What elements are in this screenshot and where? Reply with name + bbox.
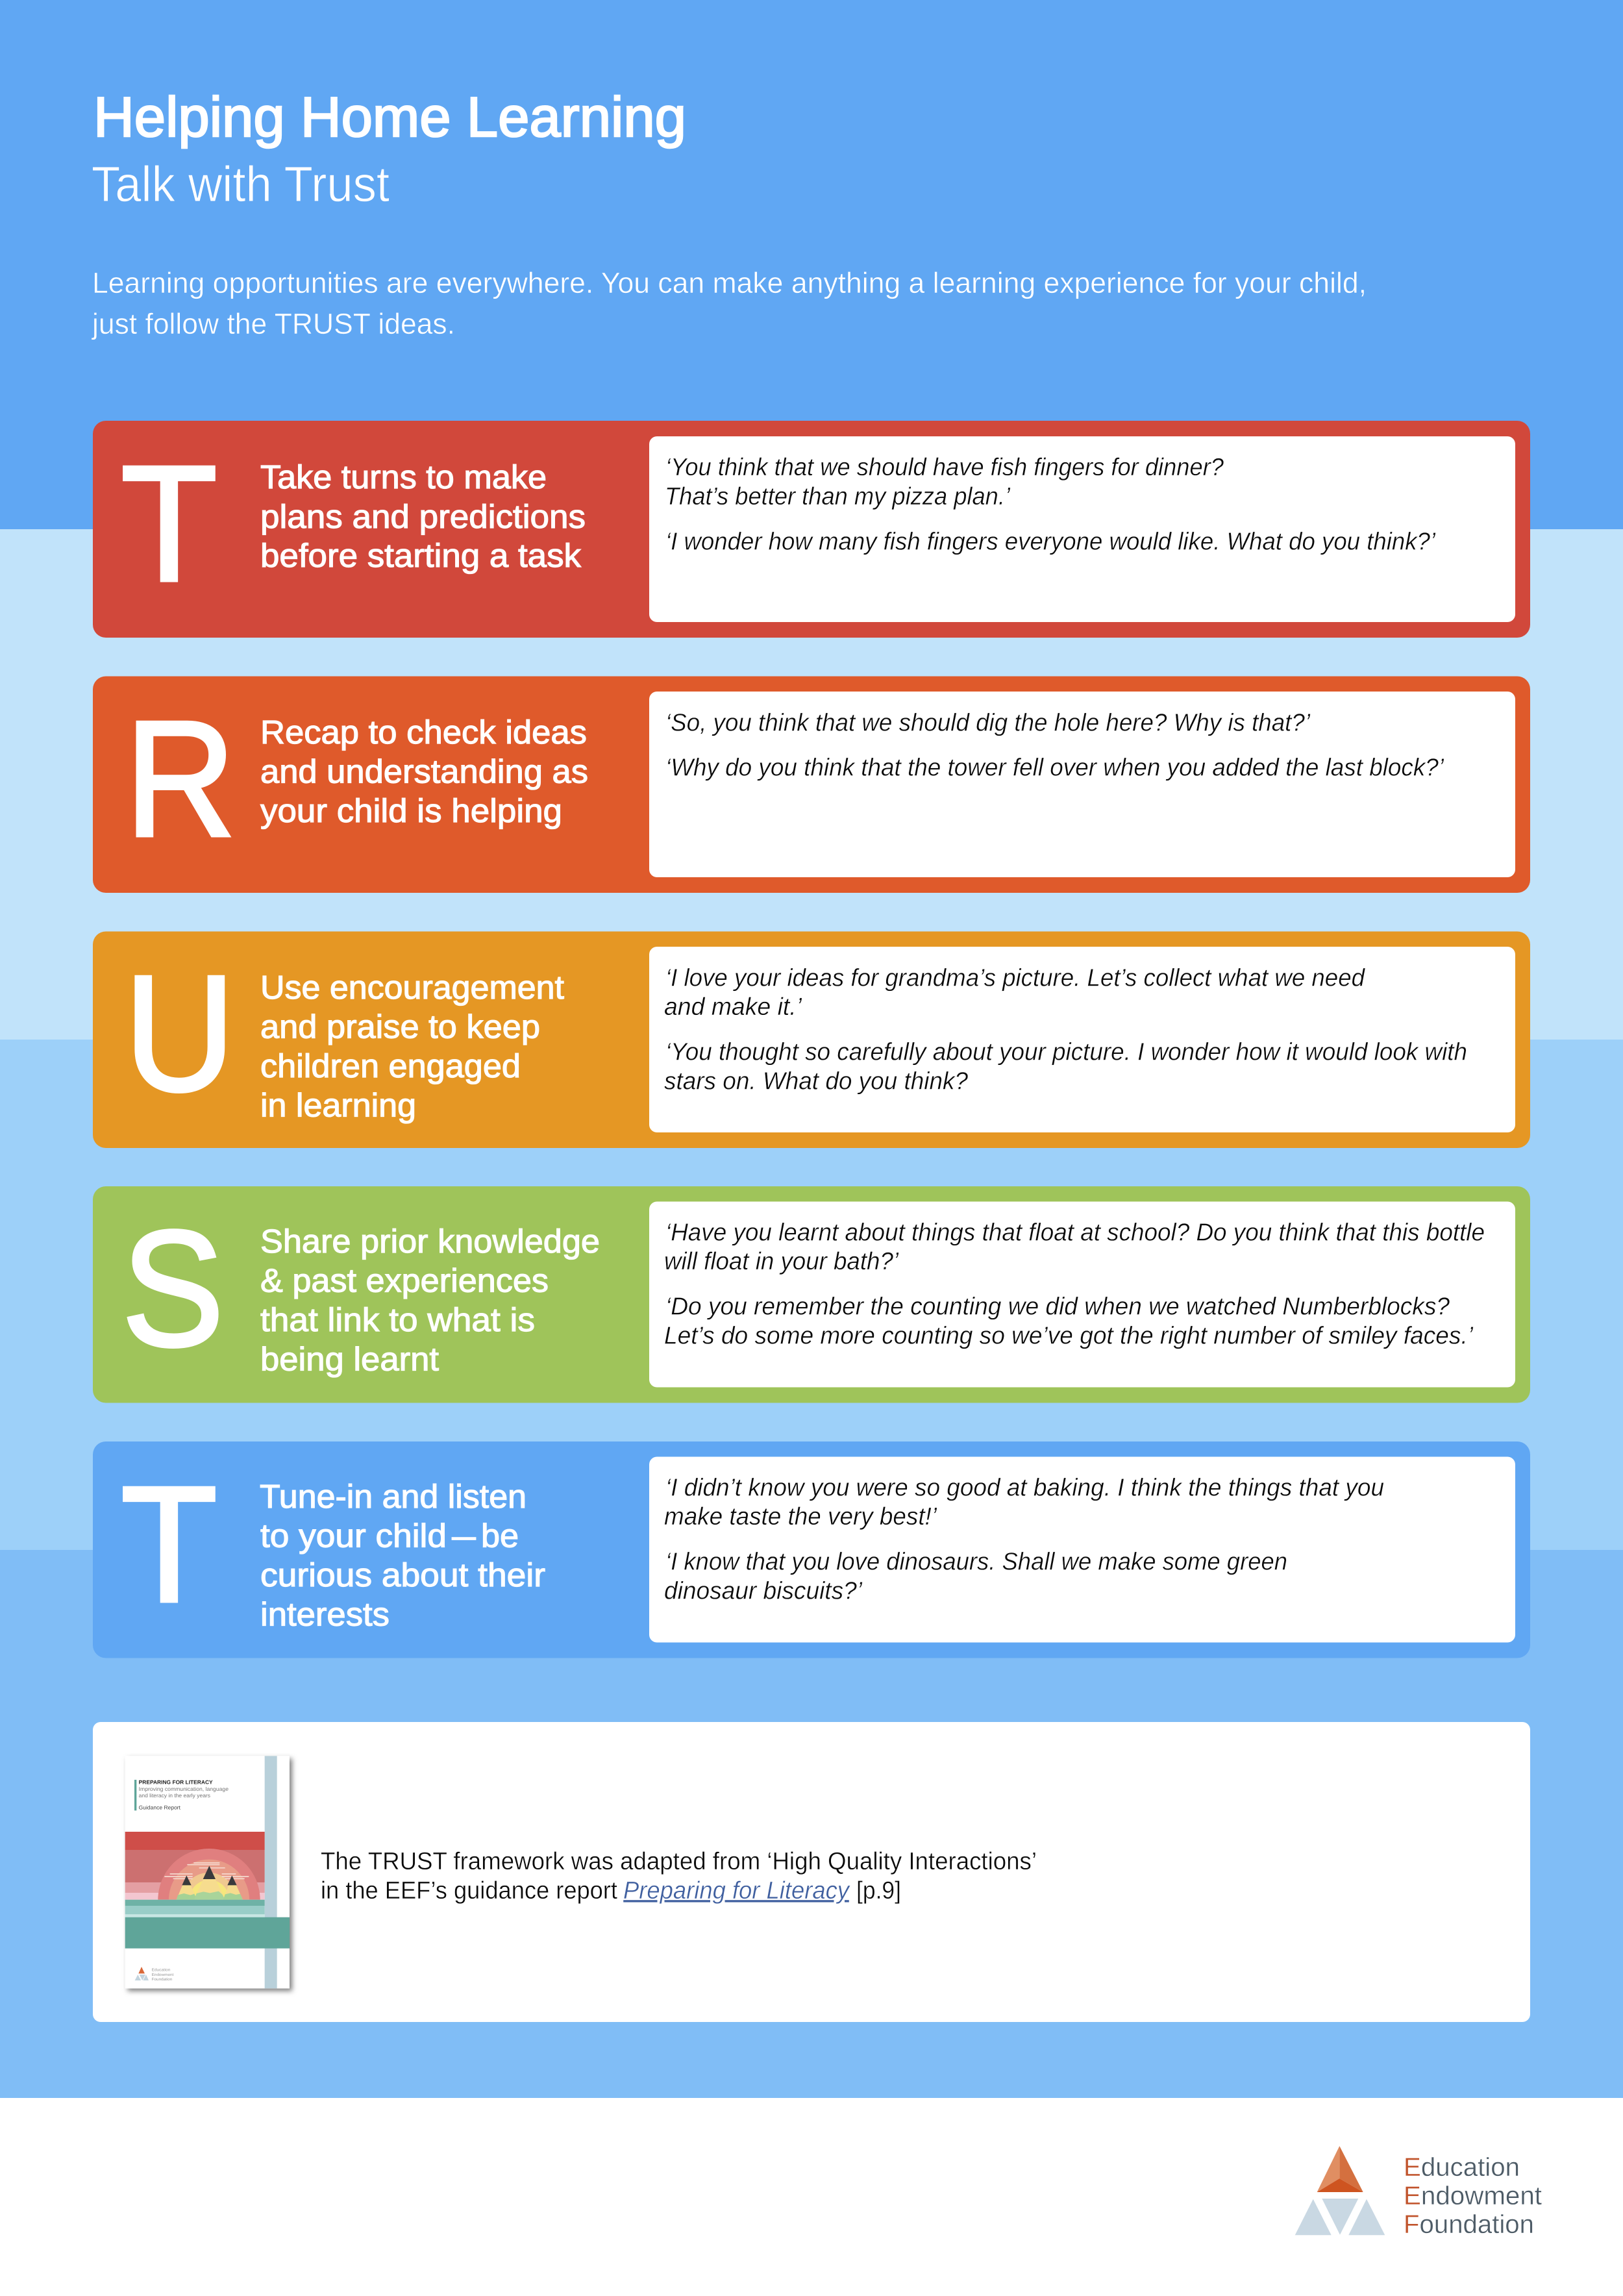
- example quotes: ‘You think that we should have fish fingers for dinner?: [665, 454, 1224, 481]
- source note text: in the EEF’s guidance report: [321, 1877, 617, 1904]
- panel: R - recap: [93, 677, 1530, 893]
- example quotes: [665, 709, 1444, 782]
- heading: use encouragement: children engaged: [260, 1047, 521, 1084]
- heading: use encouragement: in learning: [260, 1087, 416, 1123]
- example quotes: ‘Do you remember the counting we did when we watched Numberblocks?: [665, 1293, 1450, 1321]
- example quotes: Let’s do some more counting so we’ve got the right number of smiley faces.’: [664, 1322, 1474, 1349]
- example quotes: ‘I wonder how many fish fingers everyone would like. What do you think?’: [665, 529, 1436, 556]
- heading: take turns: before starting a task: [260, 537, 582, 574]
- example box: [649, 947, 1515, 1132]
- example quotes: ‘I love your ideas for grandma’s picture. Let’s collect what we need: [665, 965, 1366, 992]
- report cover thumbnail: Foundation: [152, 1977, 172, 1981]
- example quotes: [665, 454, 1436, 556]
- subtitle: Talk with Trust: [92, 156, 390, 212]
- example quotes: ‘I know that you love dinosaurs. Shall we make some green: [665, 1548, 1287, 1575]
- intro text: [91, 266, 1367, 340]
- example quotes: ‘I didn’t know you were so good at baking. I think the things that you: [665, 1474, 1384, 1501]
- heading: tune in: Tune-in and listen: [260, 1478, 527, 1515]
- logo wordmark: Education: [1404, 2153, 1520, 2182]
- heading: recap: [260, 714, 588, 829]
- example quotes: ‘Have you learnt about things that float at school? Do you think that this bottle: [665, 1219, 1485, 1247]
- example quotes: [664, 1219, 1485, 1349]
- report cover thumbnail: PREPARING FOR LITERACY: [139, 1779, 213, 1785]
- example quotes: That’s better than my pizza plan.’: [665, 483, 1011, 510]
- example quotes: ‘So, you think that we should dig the hole here? Why is that?’: [665, 709, 1311, 736]
- logo wordmark: Foundation: [1404, 2210, 1534, 2239]
- heading: share prior knowledge: Share prior knowledge: [260, 1223, 600, 1260]
- heading: tune in: be: [481, 1517, 519, 1554]
- panel: T - take turns: [93, 421, 1530, 638]
- example quotes: will float in your bath?’: [664, 1248, 899, 1275]
- example quotes: [664, 1474, 1384, 1605]
- report cover thumbnail: Education: [152, 1967, 170, 1972]
- panel: S - share prior knowledge: [93, 1186, 1530, 1403]
- heading: recap: and understanding as: [260, 753, 588, 790]
- heading: share prior knowledge: & past experiences: [260, 1262, 549, 1299]
- letter R: R: [125, 686, 236, 871]
- heading: share prior knowledge: [260, 1223, 600, 1378]
- card background: [93, 1441, 1530, 1658]
- example quotes: dinosaur biscuits?’: [664, 1578, 863, 1605]
- intro text: Learning opportunities are everywhere. You can make anything a learning experience for your child,: [92, 266, 1367, 299]
- report cover thumbnail: Endowment: [152, 1973, 173, 1977]
- heading: tune in: to your child: [260, 1517, 447, 1554]
- heading: tune in: interests: [260, 1596, 390, 1632]
- example quotes: [664, 965, 1467, 1095]
- source note text: [p.9]: [856, 1877, 901, 1904]
- letter T: T: [121, 431, 217, 616]
- heading: share prior knowledge: being learnt: [260, 1340, 439, 1378]
- heading: take turns: [260, 458, 586, 574]
- source note text: The TRUST framework was adapted from ‘High Quality Interactions’: [321, 1848, 1037, 1875]
- heading: tune in: curious about their: [260, 1556, 545, 1593]
- source note text: Preparing for Literacy: [623, 1877, 850, 1904]
- example quotes: stars on. What do you think?: [664, 1067, 969, 1095]
- heading: recap: Recap to check ideas: [260, 714, 587, 751]
- icon: triangle mark: [1295, 2146, 1385, 2235]
- intro text: just follow the TRUST ideas.: [91, 307, 455, 340]
- letter T: T: [121, 1452, 217, 1636]
- example quotes: and make it.’: [664, 993, 802, 1021]
- logo wordmark: [1404, 2153, 1542, 2239]
- example quotes: ‘Why do you think that the tower fell over when you added the last block?’: [665, 755, 1444, 782]
- example quotes: make taste the very best!’: [664, 1503, 937, 1530]
- report cover thumbnail: [125, 1756, 290, 1988]
- letter S: S: [122, 1196, 224, 1380]
- title: Helping Home Learning: [93, 86, 686, 149]
- heading: share prior knowledge: that link to what is: [260, 1301, 535, 1338]
- card background: [93, 1186, 1530, 1403]
- card background: [93, 421, 1530, 638]
- report cover thumbnail: and literacy in the early years: [139, 1793, 210, 1799]
- heading: tune in: —: [452, 1517, 476, 1554]
- source note text: [321, 1848, 1037, 1904]
- example quotes: ‘You thought so carefully about your picture. I wonder how it would look with: [665, 1039, 1467, 1066]
- example box: [649, 692, 1515, 877]
- heading: tune in: [260, 1478, 545, 1632]
- heading: use encouragement: Use encouragement: [260, 969, 564, 1006]
- panel: source note: [93, 1722, 1530, 2022]
- panel: U - use encouragement: [93, 931, 1530, 1148]
- example box: [649, 1457, 1515, 1643]
- panel: T - tune in: [93, 1441, 1530, 1658]
- heading: take turns: plans and predictions: [260, 498, 586, 535]
- letter U: U: [125, 941, 235, 1125]
- card background: [93, 931, 1530, 1148]
- report cover thumbnail: Guidance Report: [139, 1804, 180, 1811]
- report cover thumbnail: Improving communication, language: [139, 1786, 229, 1792]
- heading: use encouragement: and praise to keep: [260, 1008, 540, 1045]
- card background: [93, 677, 1530, 893]
- panel background: [93, 1722, 1530, 2022]
- logo wordmark: Endowment: [1404, 2182, 1542, 2210]
- heading: take turns: Take turns to make: [260, 458, 547, 495]
- example box: [649, 1201, 1515, 1387]
- heading: recap: your child is helping: [260, 792, 562, 829]
- heading: use encouragement: [260, 969, 564, 1123]
- EEF logo: [1295, 2146, 1542, 2239]
- example box: [649, 436, 1515, 622]
